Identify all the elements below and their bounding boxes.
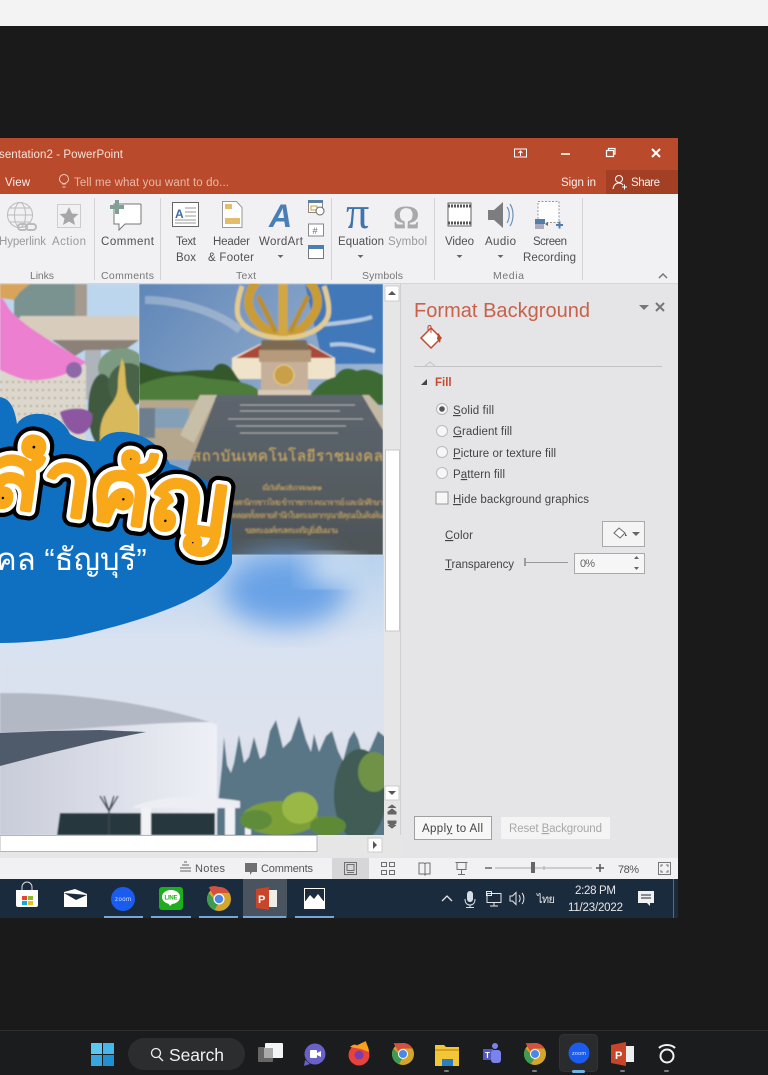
white clouds	[306, 558, 354, 582]
collapse arrow	[421, 379, 427, 385]
icon: zoom active	[560, 1034, 598, 1073]
button: reset background	[501, 817, 610, 839]
blue title blob	[0, 397, 237, 643]
pillars	[141, 808, 251, 835]
running indicators	[104, 916, 334, 918]
icon: WordArt: A	[268, 198, 292, 234]
sky blue cloud area	[223, 554, 347, 626]
group label: Text: Text	[236, 270, 256, 282]
icon: PowerPoint: P	[258, 894, 265, 906]
arrow: Video dropdown	[456, 255, 462, 258]
ribbon	[0, 187, 678, 284]
scroll down button	[385, 786, 399, 800]
canopy	[133, 797, 240, 808]
stone plaque	[178, 395, 383, 555]
pane divider	[414, 362, 662, 366]
tray: input language: ไทย	[536, 893, 555, 906]
photo: crown monument	[139, 282, 384, 555]
horizontal scrollbar	[0, 835, 401, 858]
icon: lightbulb	[60, 174, 68, 187]
label: Screen Recording: Recording	[523, 252, 576, 264]
search pill: Search	[169, 1045, 224, 1065]
antenna sculpture	[100, 796, 118, 835]
group label: Media: Media	[493, 270, 524, 282]
icon: symbol omega: Ω	[393, 200, 419, 236]
label: Header & Footer: Header	[213, 236, 250, 248]
color picker	[445, 522, 644, 546]
icon: teams: T	[485, 1051, 490, 1060]
arrow: WordArt dropdown	[278, 255, 284, 258]
plaque engraved text: ตลอดทั้งหลายสำนึกในพระมหากรุณาธิคุณเป็นล้นพ้น	[232, 509, 384, 520]
icon: presenter view	[456, 862, 468, 874]
icon: task view	[258, 1043, 283, 1062]
taskbar running dots	[444, 1070, 669, 1072]
radio: gradient fill: Gradient fill	[453, 426, 512, 438]
icon: collapse ribbon	[659, 274, 667, 278]
building lower wall	[0, 722, 218, 835]
tray: clock	[568, 885, 623, 914]
icon: text box	[172, 202, 198, 226]
transparency control	[445, 554, 644, 574]
icon: photos	[304, 888, 325, 909]
icon: firefox	[348, 1041, 370, 1066]
label: WordArt: WordArt	[259, 236, 304, 248]
icon: object	[308, 245, 324, 258]
plaque engraved text: เมื่อวันที่ ๑๘ ธันวาคม ๒๕๓๑	[262, 483, 322, 492]
plaque engraved text: พสกนิกรชาวไทย ข้าราชการ คณาจารย์ และนักศึกษา	[232, 497, 383, 507]
format background pane	[401, 284, 678, 858]
zoom slider	[485, 862, 604, 873]
icon: PowerPoint	[256, 887, 277, 910]
icon: normal view	[344, 862, 356, 874]
label: Text Box: Text	[176, 236, 197, 248]
search pill	[128, 1038, 245, 1070]
icon: equation pi: π	[346, 187, 369, 238]
share button	[606, 170, 678, 194]
icon: comment	[110, 200, 141, 230]
status bar	[0, 858, 678, 879]
top browser strip	[0, 0, 768, 26]
share button: Share	[631, 177, 660, 189]
tray: notifications	[638, 891, 654, 906]
button: apply to all: Apply to All	[422, 823, 483, 835]
photo: white building and sky	[0, 554, 392, 863]
transparency control: 0%	[580, 558, 595, 570]
radio: picture or texture fill: Picture or texture fill	[453, 448, 556, 460]
notes button: Notes	[195, 863, 226, 875]
color picker: Color	[445, 530, 473, 542]
radio: pattern fill: Pattern fill	[453, 469, 505, 481]
icon: action	[58, 204, 80, 228]
button: reset background: Reset Background	[509, 823, 602, 835]
label: Symbol: Symbol	[388, 236, 427, 248]
icon: zoom active: zoom	[572, 1051, 586, 1057]
radio: solid fill: Solid fill	[453, 405, 494, 417]
label: Header & Footer: & Footer	[208, 252, 254, 264]
next slide	[388, 821, 396, 828]
title bar	[0, 138, 678, 194]
comments button: Comments	[261, 863, 314, 875]
icon: chrome	[207, 886, 231, 911]
notes button	[180, 862, 226, 875]
icon: hyperlink	[8, 202, 36, 230]
View tab: View	[5, 177, 31, 189]
group label: Symbols: Symbols	[362, 270, 403, 282]
icon: file explorer	[435, 1045, 459, 1066]
dark tree right	[334, 749, 386, 841]
arrow: Equation dropdown	[358, 255, 364, 258]
icon: text box: A	[175, 207, 184, 221]
icon: slide number	[308, 224, 324, 236]
plaque engraved text: ขอพระองค์ทรงพระเจริญยิ่งยืนนาน	[245, 524, 339, 535]
icon: chat	[304, 1044, 326, 1066]
icon: screen recording	[535, 202, 563, 229]
icon: chrome	[524, 1043, 546, 1065]
icon: fit to window	[658, 862, 670, 874]
tray: clock: 11/23/2022	[568, 902, 623, 914]
slide canvas: photo collage	[0, 282, 392, 863]
icon: video	[448, 203, 471, 226]
icon: LINE	[159, 887, 183, 910]
tray: microphone	[465, 891, 475, 908]
transparency control: Transparency	[445, 559, 514, 571]
palm plants	[240, 792, 346, 836]
Thai subtitle: คล “ธัญบุรี”	[0, 542, 147, 579]
icon: windows start	[91, 1043, 114, 1066]
icon: audio	[488, 202, 513, 228]
monument building	[232, 344, 335, 379]
pool	[139, 400, 219, 460]
vertical scrollbar	[384, 284, 401, 858]
tell me search: Tell me what you want to do...	[74, 177, 229, 189]
icon: LINE: LINE	[164, 896, 178, 902]
Fill section	[421, 377, 644, 574]
zoom percent: 78%	[618, 864, 639, 876]
crown	[237, 282, 329, 338]
icon: slide sorter	[382, 862, 394, 874]
radio: solid fill	[436, 404, 494, 417]
icon: mail	[64, 889, 87, 907]
Fill heading: Fill	[435, 377, 452, 389]
window control: minimize	[561, 153, 570, 155]
icon: zoom: zoom	[115, 897, 131, 903]
arrow: Audio dropdown	[498, 255, 504, 258]
tray: network	[486, 892, 501, 906]
icon: ring app	[659, 1045, 675, 1062]
icon: fill bucket	[421, 326, 441, 348]
label: Screen Recording	[523, 236, 576, 264]
label: Text Box: Box	[176, 252, 196, 264]
label: Header & Footer	[208, 236, 254, 264]
icon: date time	[308, 200, 324, 215]
icon: reading view	[419, 863, 430, 875]
tray: speaker	[510, 892, 524, 904]
window control: close	[652, 149, 660, 157]
tray: chevron	[442, 896, 452, 901]
scroll thumb	[386, 450, 400, 631]
pane close	[656, 303, 664, 311]
icon: teams	[483, 1043, 501, 1063]
group label: Links: Links	[30, 270, 54, 282]
icon: chrome	[392, 1043, 414, 1065]
label: Equation: Equation	[338, 236, 384, 248]
group label: Comments: Comments	[101, 270, 154, 282]
sign in: Sign in	[561, 177, 596, 189]
window control: ribbon display	[514, 149, 526, 157]
glass front	[57, 813, 215, 835]
label: Hyperlink: Hyperlink	[0, 236, 46, 248]
building top band	[0, 693, 210, 733]
document title: sentation2 - PowerPoint	[0, 149, 124, 161]
trees band	[139, 362, 242, 386]
pane title: Format Background	[414, 300, 590, 322]
button: apply to all	[414, 816, 492, 840]
window control: restore	[606, 148, 615, 156]
radio: pattern fill	[436, 468, 505, 481]
icon: PowerPoint	[611, 1042, 634, 1066]
pedestal	[258, 340, 311, 396]
pine trees	[216, 716, 384, 835]
PowerPoint window	[0, 138, 678, 918]
plaque engraved text: สถาบันเทคโนโลยีราชมงคล	[192, 447, 383, 465]
previous slide	[388, 805, 396, 814]
icon: PowerPoint: P	[615, 1050, 622, 1062]
checkbox: hide background graphics: Hide background graphics	[453, 494, 589, 506]
label: Screen Recording: Screen	[533, 236, 567, 248]
icon: slide number: #	[312, 226, 318, 236]
label: Text Box	[176, 236, 197, 264]
photo: building with pink dress	[0, 284, 139, 442]
icon: store	[16, 882, 38, 907]
label: Comment: Comment	[101, 236, 155, 248]
dark stripe on building	[0, 730, 146, 766]
tray: clock: 2:28 PM	[575, 885, 616, 897]
scroll up button	[385, 286, 399, 301]
Windows 10 taskbar (shared screen)	[0, 879, 678, 918]
label: Video: Video	[445, 236, 474, 248]
pane menu arrow	[639, 305, 649, 310]
icon: zoom	[111, 887, 135, 911]
plaque engraved text	[192, 405, 384, 535]
label: Action: Action	[52, 236, 86, 248]
Windows 11 taskbar	[0, 1030, 768, 1075]
icon: header and footer	[222, 202, 242, 228]
label: Audio: Audio	[485, 236, 516, 248]
